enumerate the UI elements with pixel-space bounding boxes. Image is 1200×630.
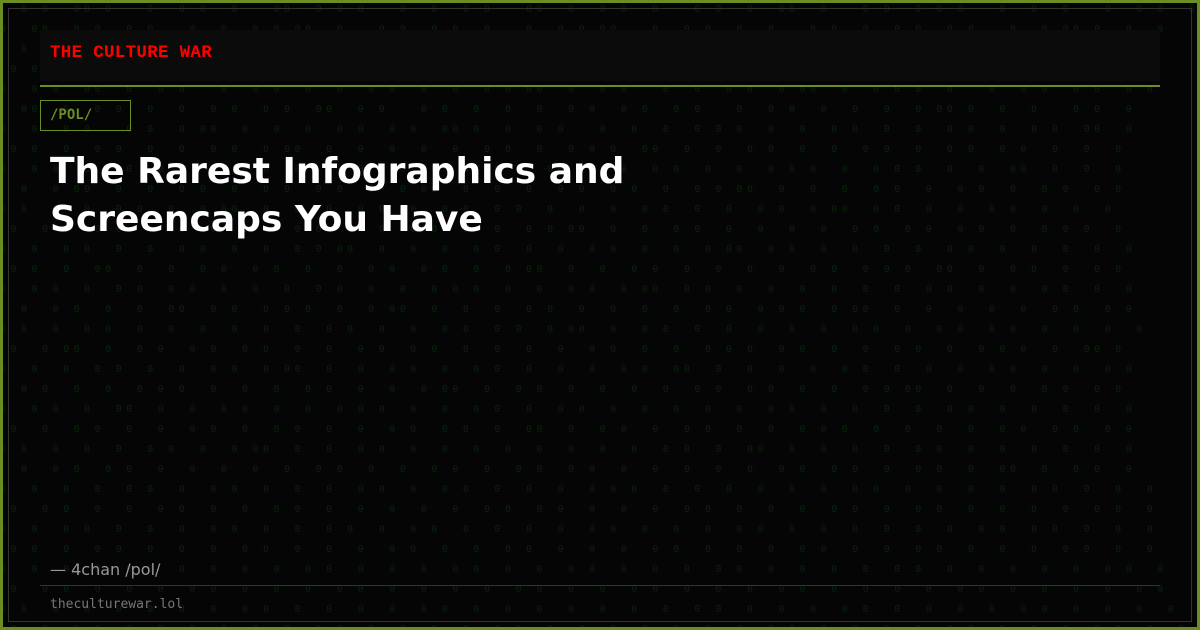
main heading: The Rarest Infographics and Screencaps You Have bbox=[50, 151, 624, 240]
tag: /pol/ bbox=[40, 100, 131, 131]
footer url: theculturewar.lol bbox=[50, 597, 183, 612]
text: 0 0 00 0 0 0 0 0 00 0 0 0 0 0 0 0 00 0 0 0 0 0 0 0 00 0 0 0 0 0 0 0 0 0 0 0 0 0 0 00 0 0 0 0 0 0 0 0 00 0 0 0 0 0 0 0 0 0 00 0 0 0 0 0 0 0 0 0 0 0 0 0 0 00 0 0 0 0 0 0 00 0 0 0 0 0 0 0 0 00 0 0 0 0 0 0 0 0 0 0 0 00 0 0 0 0 0 0 0 0 0 0 00 0 0 0 0 0 0 0 00 0 0 0 0 0 0 0 0 00 0 0 0 0 0 0 00 0 0 0 0 0 0 0 0 0 0 0 0 0 0 0 0 0 0 0 00 0 0 0 0 0 0 0 0 0 0 0 0 0 0 00 0 0 0 0 0 0 0 0 00 0 0 0 0 0 0 0 0 0 0 0 0 00 0 0 0 0 0 0 0 0 0 00 0 0 0 0 0 0 0 0 0 0 0 0 0 0 0 0 0 0 0 0 00 0 0 0 0 0 0 0 0 0 0 0 0 0 00 0 0 0 0 0 0 0 00 0 0 0 0 0 0 0 0 0 0 0 0 0 0 0 0 0 0 0 0 0 00 0 0 0 0 0 0 0 0 0 0 0 00 0 0 0 0 0 0 0 0 0 0 0 00 0 0 0 0 0 0 0 0 0 0 0 0 0 0 0 0 0 0 0 0 00 0 0 0 0 0 0 0 0 0 0 0 0 0 0 00 0 0 0 0 0 0 0 0 0 0 0 0 0 0 0 00 0 0 0 0 0 00 0 0 0 0 0 0 0 0 0 0 0 00 0 0 0 0 0 0 0 0 0 0 00 0 0 0 0 0 0 0 0 0 0 0 0 0 0 0 0 0 0 0 0 0 00 0 0 0 0 0 0 0 0 0 0 0 0 0 0 0 0 0 0 0 0 00 0 0 0 0 0 0 0 0 0 0 0 0 0 0 0 00 0 0 0 0 0 0 0 0 0 0 0 0 0 00 0 0 0 0 0 0 0 0 0 0 0 0 0 0 0 0 0 0 0 0 0 0 0 0 0 0 0 0 0 0 0 00 0 0 0 0 0 0 0 0 0 0 0 0 00 0 0 0 0 0 0 0 0 0 0 0 0 0 0 0 0 00 0 0 0 0 0 0 0 0 0 0 0 0 0 0 00 0 0 0 0 0 0 0 0 0 0 0 0 0 00 0 0 0 0 0 0 0 0 0 0 0 0 0 0 0 0 0 0 0 0 0 0 0 0 0 0 0 0 0 00 0 0 0 0 0 0 0 0 0 0 0 0 0 0 0 0 0 0 0 0 0 00 0 0 0 0 0 0 0 00 0 0 0 0 0 0 0 0 0 0 0 0 0 0 0 00 0 0 0 0 0 0 0 0 0 0 0 0 0 0 0 0 0 0 0 0 0 0 0 0 0 0 0 0 0 00 0 0 0 0 0 0 0 0 0 0 0 0 0 0 0 0 0 0 0 0 0 00 0 0 0 0 0 0 0 0 0 0 0 0 0 0 0 0 0 0 0 0 0 0 0 0 0 0 0 0 0 0 0 0 0 0 0 00 0 0 0 0 0 0 0 0 0 0 0 00 0 0 0 0 0 0 0 0 0 0 0 0 00 0 0 0 0 0 0 0 0 0 0 0 0 0 0 0 0 0 0 0 0 0 0 0 0 0 0 0 0 0 0 00 0 0 0 0 0 0 0 0 0 0 0 0 0 0 0 00 0 0 0 0 0 0 0 0 0 0 0 00 0 0 0 0 0 0 0 0 0 0 0 0 0 0 0 0 0 0 0 0 0 0 0 0 0 0 0 0 0 0 0 0 0 0 0 0 0 0 0 0 0 0 0 0 0 0 0 0 0 0 0 0 00 0 0 0 0 0 0 0 0 0 0 0 0 0 0 0 0 0 0 0 0 0 0 0 0 0 0 0 0 0 0 00 0 0 0 0 0 0 0 0 0 0 0 0 0 0 0 00 0 0 0 0 0 0 0 0 0 0 0 0 0 0 0 0 0 0 0 0 0 0 0 0 0 0 0 0 0 0 0 0 0 0 0 0 0 0 0 0 0 0 0 0 0 0 00 0 0 0 0 0 0 0 0 0 0 0 0 0 0 0 0 0 0 0 0 0 0 0 0 0 0 0 0 0 0 0 0 0 0 0 0 0 0 0 0 0 0 0 0 0 0 0 0 0 0 0 0 0 0 0 0 0 0 0 0 0 0 0 0 0 0 0 0 0 0 0 0 0 0 0 0 0 0 0 0 0 0 0 0 0 0 0 0 0 0 0 0 0 0 0 0 0 0 0 0 0 0 0 0 0 0 0 0 0 0 0 0 0 0 0 0 0 0 0 0 0 0 0 0 0 0 0 0 0 0 0 0 0 0 0 0 0 0 0 0 0 0 0 0 0 0 0 0 0 0 0 0 0 0 0 0 0 0 0 0 0 0 0 0 0 0 0 0 0 0 0 0 0 0 0 0 0 0 0 0 0 0 0 0 0 0 0 0 0 0 0 0 0 0 0 0 0 0 0 0 0 0 0 0 0 0 0 0 0 0 0 0 0 0 0 0 0 0 0 0 0 0 0 0 0 0 0 0 0 0 0 0 0 0 0 0 0 0 0 0 0 0 0 0 0 0 0 0 0 0 0 0 0 0 0 0 0 0 0 0 0 0 0 0 0 0 0 0 0 0 0 0 0 0 0 0 0 0 0 0 0 0 0 0 0 0 0 0 0 0 0 0 0 0 0 0 0 0 0 0 0 0 0 0 0 0 0 0 0 0 0 0 0 0 0 0 0 0 0 0 0 0 0 0 bbox=[0, 4, 1199, 630]
source attribution: — 4chan /pol/ bbox=[50, 560, 160, 579]
brand title: THE CULTURE WAR bbox=[50, 43, 212, 63]
tag: /pol/: /POL/ bbox=[50, 107, 92, 123]
header bar bbox=[40, 30, 1160, 81]
